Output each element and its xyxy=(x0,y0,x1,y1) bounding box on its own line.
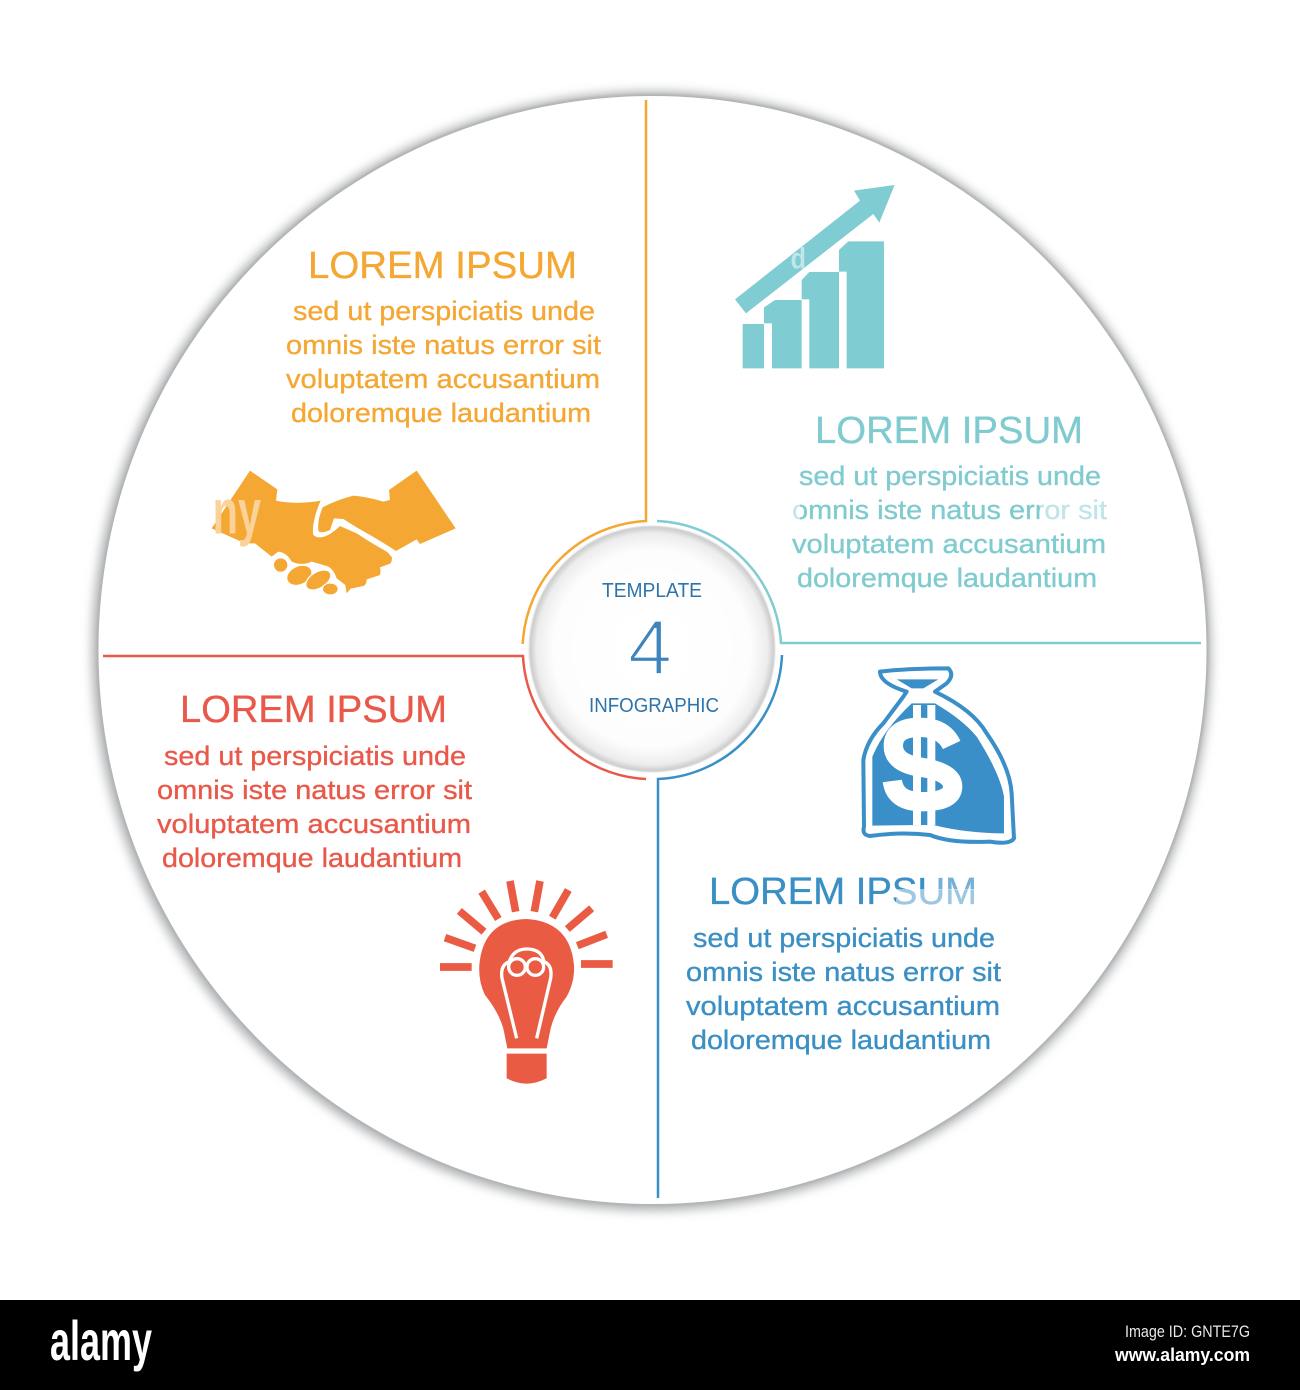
footer image id: Image ID: GNTE7G xyxy=(1125,1322,1250,1341)
teal body xyxy=(792,461,1108,593)
chart bars xyxy=(743,241,884,368)
footer url: www.alamy.com xyxy=(1114,1345,1250,1365)
orange body: sed ut perspiciatis unde xyxy=(293,296,595,326)
teal body: sed ut perspiciatis unde xyxy=(799,461,1101,491)
bulb base xyxy=(507,1054,547,1084)
orange heading: LOREM IPSUM xyxy=(308,245,577,287)
icon: money bag xyxy=(863,668,1014,843)
red divider and arc xyxy=(103,656,646,779)
orange body: omnis iste natus error sit xyxy=(286,330,602,360)
teal body: doloremque laudantium xyxy=(797,563,1097,593)
red text block xyxy=(157,689,473,873)
blue body: sed ut perspiciatis unde xyxy=(693,923,995,953)
bulb body xyxy=(479,919,574,1048)
icon: handshake xyxy=(212,471,456,595)
red body xyxy=(157,741,473,873)
blue text block xyxy=(686,871,1002,1055)
teal divider and arc xyxy=(657,521,1201,643)
orange divider and arc xyxy=(523,100,646,644)
icon: handshake: ny xyxy=(213,477,261,547)
footer logo: alamy xyxy=(50,1309,152,1372)
main circle with shadow xyxy=(92,91,1212,1211)
blue body: omnis iste natus error sit xyxy=(686,957,1002,987)
teal body: voluptatem accusantium xyxy=(792,529,1106,559)
blue body: doloremque laudantium xyxy=(691,1025,991,1055)
footer bar xyxy=(0,1300,1300,1390)
hub number: 4 xyxy=(628,603,672,691)
red heading: LOREM IPSUM xyxy=(180,689,447,731)
watermark fades over text xyxy=(790,498,1110,907)
bulb rays xyxy=(440,881,613,967)
teal text block xyxy=(792,410,1108,593)
bulb filament xyxy=(502,949,551,1038)
blue body: voluptatem accusantium xyxy=(686,991,1000,1021)
orange body xyxy=(286,296,602,428)
icon: growth chart: d xyxy=(791,242,806,275)
orange body: voluptatem accusantium xyxy=(286,364,600,394)
orange text block xyxy=(286,245,602,428)
icon: light bulb xyxy=(440,881,613,1084)
red body: doloremque laudantium xyxy=(162,843,462,873)
teal body: omnis iste natus error sit xyxy=(792,495,1108,525)
icon: growth chart xyxy=(735,185,895,368)
hub label: infographic: INFOGRAPHIC xyxy=(589,695,719,717)
red body: voluptatem accusantium xyxy=(157,809,471,839)
chart arrow xyxy=(735,185,895,313)
orange body: doloremque laudantium xyxy=(291,398,591,428)
hub label: template: TEMPLATE xyxy=(602,580,702,602)
center hub xyxy=(529,526,775,772)
teal heading: LOREM IPSUM xyxy=(815,410,1083,452)
red body: omnis iste natus error sit xyxy=(157,775,473,805)
red body: sed ut perspiciatis unde xyxy=(164,741,466,771)
blue heading: LOREM IPSUM xyxy=(709,871,977,913)
blue body xyxy=(686,923,1002,1055)
blue divider and arc xyxy=(658,655,782,1198)
